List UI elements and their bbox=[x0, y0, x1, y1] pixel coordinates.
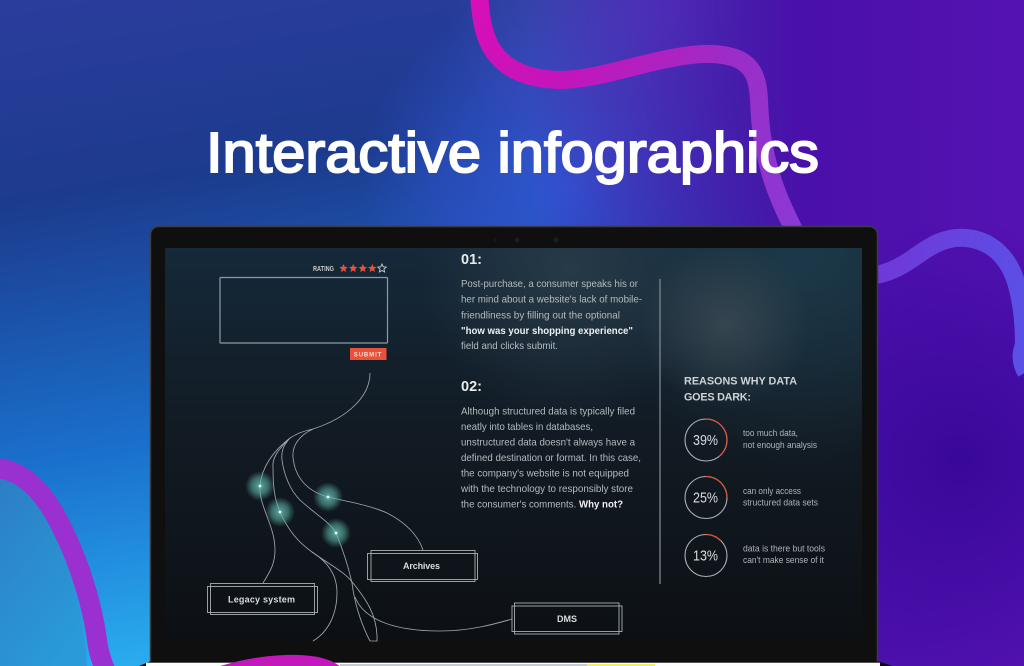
laptop base strip bbox=[139, 655, 892, 666]
box: Archives: Archives bbox=[403, 561, 440, 571]
text block 01: her mind about a website's lack of mobile- bbox=[461, 294, 642, 306]
text block 01: friendliness by filling out the optional bbox=[461, 310, 620, 322]
swoosh: bottom-left purple ribbon bbox=[0, 468, 106, 666]
rating label and stars bbox=[313, 264, 386, 273]
stat: 25%: 25% bbox=[693, 490, 718, 506]
stat: 25%: structured data sets bbox=[743, 498, 818, 508]
laptop bezel bbox=[150, 226, 878, 666]
stat: 25% bbox=[685, 476, 818, 518]
text block 02: the consumer's comments. Why not? bbox=[461, 498, 623, 510]
heading: reasons why data goes dark bbox=[684, 376, 797, 404]
screen bbox=[165, 248, 862, 642]
rating label and stars: RATING bbox=[313, 266, 334, 273]
text block 02: defined destination or format. In this case, bbox=[461, 452, 641, 464]
swoosh: right violet ribbon bbox=[870, 238, 1024, 372]
box: Legacy system: Legacy system bbox=[228, 594, 295, 604]
stat: 13% bbox=[685, 534, 825, 576]
title: Interactive infographics bbox=[206, 121, 819, 185]
stat: 13%: 13% bbox=[693, 548, 718, 564]
text block 02: Although structured data is typically filed bbox=[461, 406, 635, 418]
swoosh: top magenta ribbon bbox=[479, 0, 795, 232]
glowing nodes bbox=[245, 471, 351, 548]
stat: 13%: can't make sense of it bbox=[743, 555, 824, 565]
box: Legacy system bbox=[208, 584, 318, 614]
text block 01: 01: bbox=[461, 251, 482, 268]
box: DMS bbox=[512, 603, 622, 634]
screen background bbox=[165, 248, 862, 642]
feedback form box bbox=[220, 278, 388, 343]
flow lines bbox=[260, 373, 512, 641]
text block 02: 02: bbox=[461, 378, 482, 395]
submit button: SUBMIT bbox=[354, 352, 382, 358]
stat: 39%: not enough analysis bbox=[743, 440, 817, 450]
text block 01: "how was your shopping experience" bbox=[461, 325, 633, 337]
text block 01: field and clicks submit. bbox=[461, 340, 558, 352]
text block 01: Post-purchase, a consumer speaks his or bbox=[461, 278, 638, 290]
text block 02: with the technology to responsibly store bbox=[460, 483, 633, 495]
text block 01 bbox=[461, 251, 642, 352]
stat: 25%: can only access bbox=[743, 486, 801, 496]
stat: 39%: too much data, bbox=[743, 428, 798, 438]
camera dots bbox=[494, 238, 558, 242]
heading: reasons why data goes dark: GOES DARK: bbox=[684, 392, 751, 404]
laptop bbox=[139, 226, 892, 666]
text block 02: neatly into tables in databases, bbox=[461, 421, 593, 433]
box: DMS: DMS bbox=[557, 614, 577, 624]
stat: 39%: 39% bbox=[693, 433, 718, 449]
vertical divider bbox=[659, 279, 661, 584]
text block 02 bbox=[460, 378, 641, 510]
text block 02: unstructured data doesn't always have a bbox=[461, 436, 635, 448]
submit button bbox=[350, 348, 386, 360]
text block 02: the company's website is not equipped bbox=[461, 468, 629, 480]
stat: 13%: data is there but tools bbox=[743, 544, 825, 554]
stat: 39% bbox=[685, 419, 817, 461]
box: Archives bbox=[368, 550, 478, 582]
heading: reasons why data goes dark: REASONS WHY DATA bbox=[684, 376, 797, 388]
